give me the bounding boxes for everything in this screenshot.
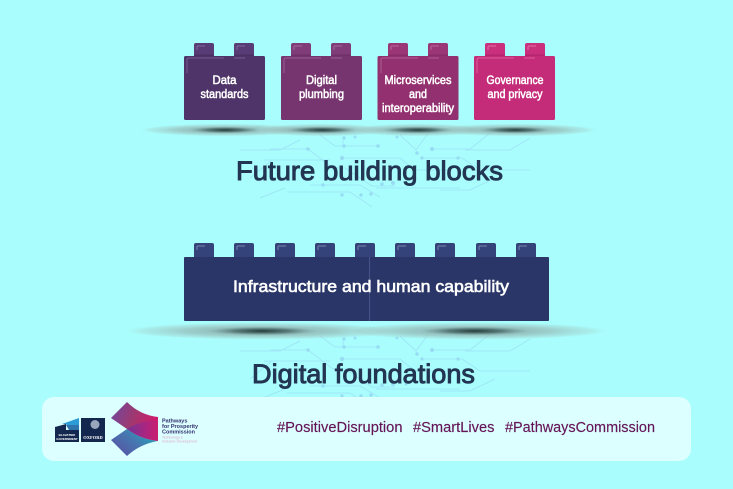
hashtags: #PositiveDisruption [277, 420, 402, 436]
block: microservices and interoperability: Microservices [384, 75, 452, 87]
block: governance and privacy [474, 43, 555, 120]
block: microservices and interoperability [378, 43, 458, 120]
logo text: Pathways for Prosperity Commission: Technology & [162, 436, 184, 440]
heading: future building blocks: Future building blocks [236, 156, 503, 186]
hashtags: #SmartLives [413, 420, 494, 436]
circuit pattern: upper [240, 128, 530, 207]
block: digital plumbing [281, 43, 362, 120]
logo text: Pathways for Prosperity Commission [162, 418, 199, 444]
heading: digital foundations: Digital foundations [252, 359, 475, 389]
logo: Blavatnik School of Government [55, 418, 79, 442]
logo text: Pathways for Prosperity Commission: for Prosperity [162, 424, 199, 430]
logo: Pathways chevron mark [111, 402, 158, 456]
block: infrastructure and human capability: Infrastructure and human capability [233, 277, 510, 296]
logo: University of Oxford [81, 418, 105, 442]
logo: Blavatnik School of Government: GOVERNMENT [56, 437, 78, 441]
block: data standards: standards [200, 89, 249, 101]
block: microservices and interoperability: interoperability [382, 103, 454, 115]
logo text: Pathways for Prosperity Commission: Commission [162, 430, 196, 436]
block: digital plumbing: Digital [306, 75, 337, 87]
logo text: Pathways for Prosperity Commission: Pathways [162, 418, 187, 424]
block: governance and privacy: and privacy [488, 89, 543, 101]
circuit pattern: lower [240, 329, 530, 408]
block: data standards: Data [212, 75, 237, 87]
footer panel [42, 397, 691, 461]
block: data standards [184, 43, 265, 120]
hashtags: #PathwaysCommission [505, 420, 655, 436]
block: microservices and interoperability: and [409, 89, 427, 101]
logo: University of Oxford: OXFORD [83, 435, 103, 440]
block: digital plumbing: plumbing [299, 89, 344, 101]
shadow under digital foundations [119, 322, 613, 340]
logo: Blavatnik School of Government: BLAVATNIK [59, 433, 76, 437]
logo text: Pathways for Prosperity Commission: Inclusive Development [162, 440, 197, 444]
block: infrastructure and human capability [184, 243, 549, 321]
block: governance and privacy: Governance [486, 75, 544, 87]
hashtags [277, 420, 655, 436]
shadows under future building blocks [137, 124, 600, 136]
